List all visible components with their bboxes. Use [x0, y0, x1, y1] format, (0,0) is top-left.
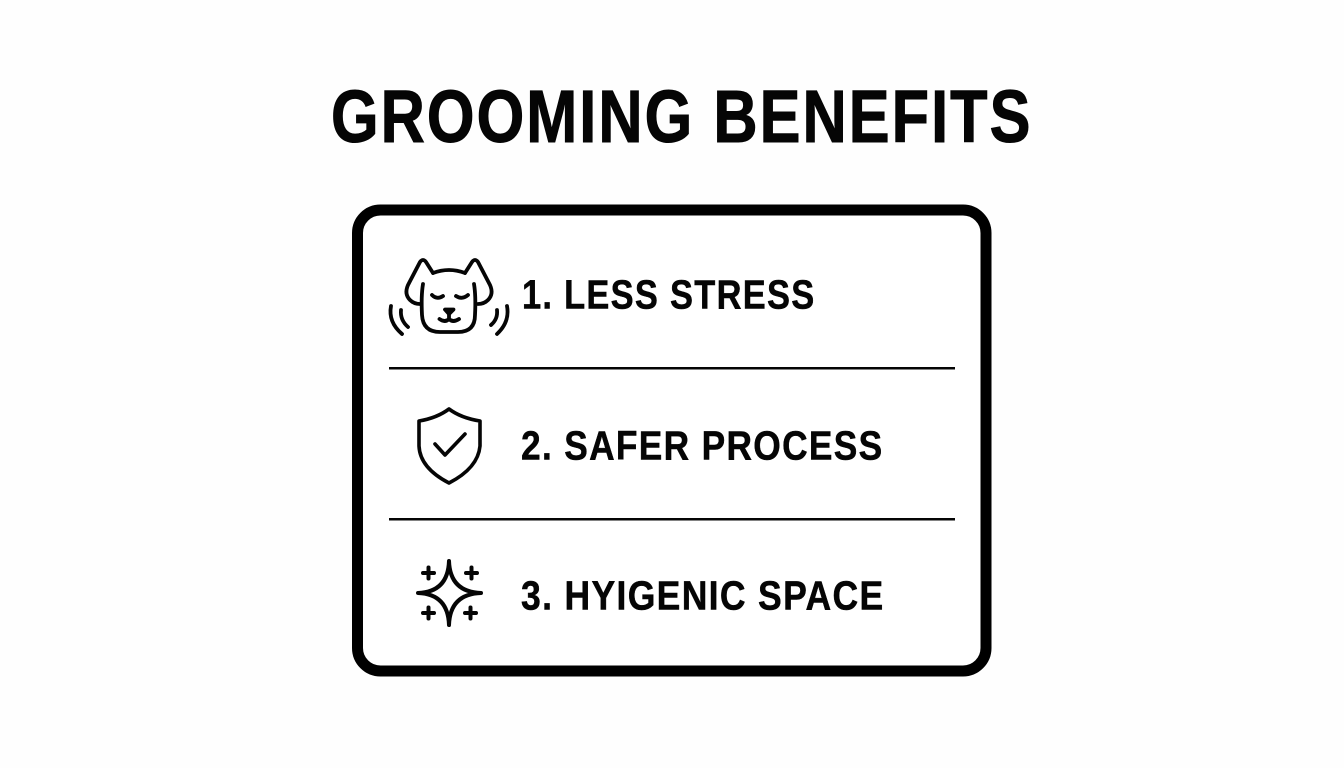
benefit 1 label: 1. LESS STRESS	[522, 272, 816, 318]
title: GROOMING BENEFITS	[331, 75, 1032, 158]
divider	[389, 367, 955, 370]
icon: shield with check	[419, 409, 480, 483]
icon: sparkle	[418, 561, 481, 625]
benefit 3 label: 3. HYIGENIC SPACE	[521, 572, 884, 618]
divider	[389, 518, 955, 520]
panel: benefits list	[358, 210, 986, 671]
icon: calm dog	[390, 260, 508, 334]
benefit 2 label: 2. SAFER PROCESS	[521, 422, 884, 468]
panel frame	[358, 210, 986, 671]
